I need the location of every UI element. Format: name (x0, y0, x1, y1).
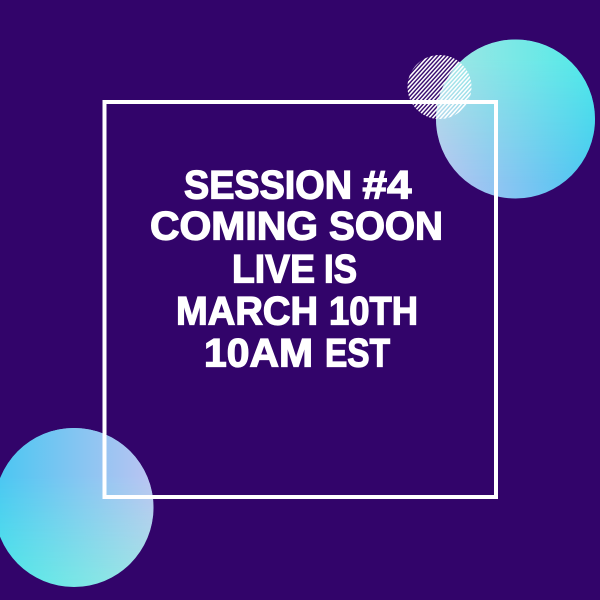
hatched circle (408, 55, 472, 119)
heading text: 10TH (329, 290, 418, 334)
heading text: EST (325, 332, 390, 376)
heading text: IS (324, 248, 357, 292)
heading text: COMING (150, 204, 318, 248)
white square frame (104, 102, 496, 497)
heading text: LIVE (232, 248, 315, 292)
top right gradient circle (436, 40, 595, 198)
heading text: 10AM (204, 332, 313, 376)
heading text: #4 (362, 164, 412, 208)
heading text: SESSION (184, 164, 352, 208)
heading text: SOON (329, 204, 443, 248)
heading text: MARCH (176, 290, 318, 334)
heading text (150, 164, 443, 376)
bottom left gradient circle (0, 428, 154, 587)
